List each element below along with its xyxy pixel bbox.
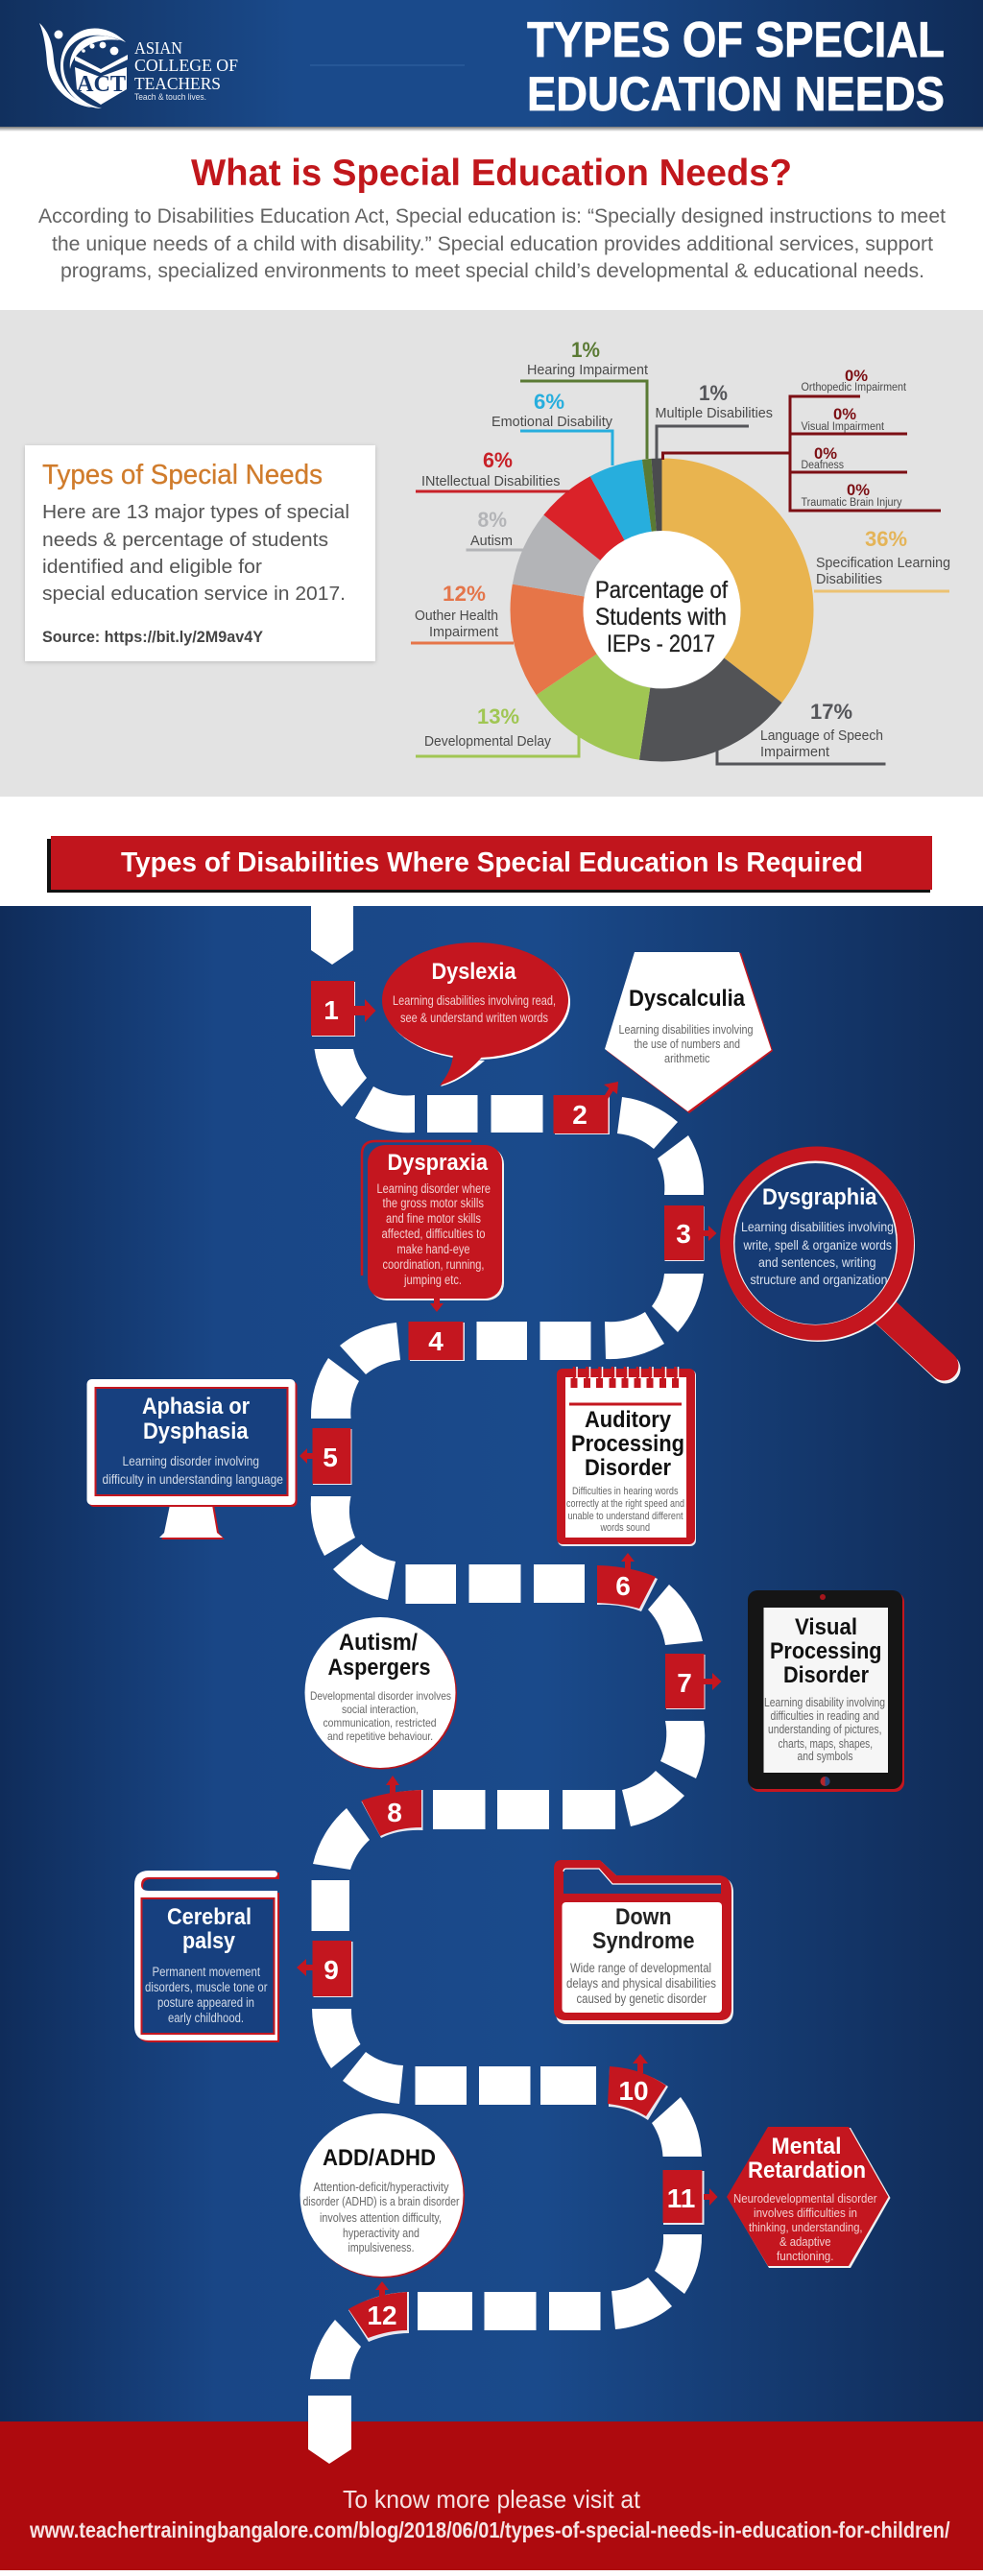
text card: identified and eligible for [42, 557, 262, 578]
card: Cerebral palsy book: palsy [182, 1928, 236, 1954]
label: specific learning disabilities: Specification Learning [816, 556, 950, 571]
logo: Asian College of Teachers: COLLEGE OF [134, 56, 238, 75]
card: Down Syndrome folder: caused by genetic disorder [576, 1992, 707, 2006]
step 1 marker: 1 [324, 995, 339, 1025]
path end arrow [308, 2396, 351, 2464]
card: Dysgraphia magnifying glass [720, 1146, 946, 1369]
step 1 marker [311, 981, 376, 1037]
label: hearing impairment [520, 338, 648, 459]
card: Aphasia or Dysphasia monitor [86, 1379, 298, 1539]
card: Mental Retardation hexagon: Neurodevelopmental disorder [733, 2191, 877, 2206]
text card: Types of Special Needs [42, 460, 323, 490]
label: language of speech impairment: 17% [810, 700, 852, 724]
step 10 marker [608, 2054, 668, 2120]
label: autism: 8% [478, 508, 507, 532]
card: Visual Processing Disorder tablet: Processing [770, 1638, 881, 1664]
step 9 marker: 9 [324, 1955, 339, 1985]
card: Auditory Processing Disorder notepad: Processing [571, 1431, 684, 1457]
logo: Asian College of Teachers [39, 23, 238, 108]
card: Auditory Processing Disorder notepad: unable to understand different [568, 1511, 683, 1522]
label: language of speech impairment: Language of Speech [760, 728, 883, 744]
step 12 marker: 12 [367, 2301, 397, 2330]
intro paragraph: According to Disabilities Education Act, Special education is: “Specially designed instructions to meet [38, 204, 946, 227]
step 4 marker [409, 1322, 465, 1361]
label: specific learning disabilities: Disabilities [816, 572, 882, 587]
card: Dyscalculia pentagon: arithmetic [664, 1051, 710, 1065]
label group: zero percent categories [662, 367, 941, 511]
panel: types of special needs chart section [0, 310, 983, 797]
card: Cerebral palsy book: disorders, muscle tone or [145, 1980, 268, 1994]
card: Auditory Processing Disorder notepad: Auditory [585, 1407, 672, 1433]
label: hearing impairment: 1% [571, 338, 600, 362]
card: ADD/ADHD circle: ADD/ADHD [323, 2145, 436, 2171]
label: language of speech impairment [717, 700, 885, 764]
footer text [29, 2485, 950, 2542]
step 2 marker: 2 [572, 1100, 587, 1130]
header band [0, 0, 983, 131]
card: Aphasia or Dysphasia monitor: Learning disorder involving [123, 1453, 259, 1468]
label: other health impairment [411, 582, 514, 643]
card: Mental Retardation hexagon: involves difficulties in [754, 2206, 857, 2220]
card: Dyspraxia rounded note: jumping etc. [403, 1273, 462, 1287]
card: Cerebral palsy book: Cerebral [167, 1904, 252, 1930]
card: Dysgraphia magnifying glass: write, spell & organize words [743, 1237, 892, 1252]
text card: needs & percentage of students [42, 530, 328, 551]
label: other health impairment: Impairment [429, 625, 498, 640]
card: Dyslexia speech bubble: Dyslexia [432, 959, 516, 985]
card: Visual Processing Disorder tablet: difficulties in reading and [770, 1709, 879, 1723]
card: Autism/Aspergers circle: Autism/ [339, 1630, 418, 1656]
main title [527, 12, 945, 121]
card: Dyslexia speech bubble [382, 942, 570, 1086]
card: Mental Retardation hexagon: Retardation [748, 2158, 866, 2183]
section banner [47, 836, 932, 893]
donut chart [547, 495, 778, 726]
card: Dyscalculia pentagon: Learning disabilities involving [618, 1022, 753, 1037]
intro heading: What is Special Education Needs? [191, 153, 792, 194]
card: Visual Processing Disorder tablet: Visual [795, 1614, 857, 1640]
card: Dysgraphia magnifying glass: structure and organization [751, 1272, 887, 1287]
logo: Asian College of Teachers: ACT [77, 72, 126, 97]
road path segments [310, 906, 705, 2379]
label: autism: Autism [470, 534, 513, 549]
donut centre label: Students with [595, 604, 727, 631]
card: Dyscalculia pentagon: the use of numbers and [634, 1037, 740, 1051]
step 11 marker: 11 [667, 2183, 695, 2213]
step 8 marker: 8 [387, 1798, 402, 1827]
card: Dyscalculia pentagon [605, 952, 773, 1113]
card: Auditory Processing Disorder notepad: correctly at the right speed and [566, 1498, 684, 1510]
text card: special education service in 2017. [42, 584, 346, 605]
card: Aphasia or Dysphasia monitor: Dysphasia [143, 1419, 249, 1444]
step 12 marker [348, 2281, 409, 2342]
label group: zero percent categories: 0% [814, 444, 837, 463]
card: Cerebral palsy book: early childhood. [168, 2011, 244, 2025]
card: Mental Retardation hexagon: Mental [772, 2134, 841, 2159]
logo: Asian College of Teachers: TEACHERS [134, 74, 221, 93]
card: Dyslexia speech bubble: see & understand written words [400, 1010, 548, 1025]
card: Dyspraxia rounded note: Learning disorder where [376, 1181, 491, 1196]
label: emotional disability: Emotional Disability [492, 415, 613, 430]
intro paragraph: programs, specialized environments to meet special child’s developmental & educational needs. [60, 259, 924, 282]
label: intellectual disabilities [416, 448, 569, 491]
card: Dyscalculia pentagon: Dyscalculia [629, 986, 746, 1012]
card: Down Syndrome folder [554, 1860, 733, 2024]
card: Visual Processing Disorder tablet: Disorder [783, 1662, 869, 1688]
card: ADD/ADHD circle: Attention-deficit/hyperactivity [313, 2180, 449, 2194]
label group: zero percent categories: 0% [833, 405, 856, 423]
card: Visual Processing Disorder tablet: and symbols [797, 1750, 852, 1763]
footer text: To know more please visit at [343, 2485, 641, 2514]
intro section [38, 153, 946, 282]
card: Auditory Processing Disorder notepad [557, 1367, 696, 1546]
card: Dyspraxia rounded note: affected, difficulties to [382, 1227, 486, 1241]
card: Auditory Processing Disorder notepad: Disorder [585, 1455, 671, 1481]
label: specific learning disabilities [814, 527, 950, 591]
card: Dysgraphia magnifying glass: Learning disabilities involving [741, 1219, 894, 1234]
card: Cerebral palsy book: posture appeared in [157, 1995, 254, 2010]
step 3 marker [664, 1205, 716, 1261]
card: Down Syndrome folder: delays and physical disabilities [566, 1976, 716, 1991]
card: Dyspraxia rounded note: and fine motor skills [386, 1211, 481, 1226]
step 6 marker: 6 [615, 1571, 631, 1601]
card: Visual Processing Disorder tablet [748, 1590, 904, 1792]
label: other health impairment: Outher Health [415, 608, 498, 624]
label group: zero percent categories: Visual Impairment [801, 421, 885, 433]
label: intellectual disabilities: INtellectual Disabilities [421, 474, 561, 489]
label: multiple disabilities [655, 381, 773, 459]
card: Auditory Processing Disorder notepad: Difficulties in hearing words [572, 1486, 679, 1497]
card: Autism/Aspergers circle: and repetitive behaviour. [327, 1729, 433, 1743]
step 3 marker: 3 [676, 1219, 691, 1249]
card: Cerebral palsy book [134, 1871, 279, 2042]
card: Autism/Aspergers circle [305, 1617, 457, 1770]
label: language of speech impairment: Impairment [760, 745, 829, 760]
step 5 marker [300, 1428, 351, 1485]
step 10 marker: 10 [618, 2076, 649, 2106]
card: ADD/ADHD circle: impulsiveness. [348, 2240, 415, 2254]
main title: EDUCATION NEEDS [527, 67, 945, 121]
card: Dysgraphia magnifying glass: and sentences, writing [758, 1254, 875, 1270]
label group: zero percent categories: 0% [845, 367, 868, 385]
card: Visual Processing Disorder tablet: understanding of pictures, [768, 1723, 881, 1736]
card: Autism/Aspergers circle: social interaction, [342, 1703, 419, 1716]
card: Mental Retardation hexagon [727, 2127, 891, 2268]
label: autism [467, 508, 531, 550]
intro paragraph [38, 204, 946, 282]
card: ADD/ADHD circle: disorder (ADHD) is a brain disorder [303, 2194, 460, 2208]
step 11 marker [662, 2170, 718, 2225]
donut centre label: IEPs - 2017 [607, 631, 715, 657]
label: developmental delay: Developmental Delay [424, 734, 552, 750]
label: developmental delay: 13% [477, 704, 519, 728]
text card: Source: https://bit.ly/2M9av4Y [42, 628, 264, 646]
step 7 marker [665, 1654, 722, 1709]
logo: Asian College of Teachers: Teach & touch lives. [134, 92, 206, 103]
card: Visual Processing Disorder tablet: charts, maps, shapes, [778, 1737, 873, 1751]
card: Autism/Aspergers circle: Developmental disorder involves [310, 1689, 451, 1703]
card: Visual Processing Disorder tablet: Learning disability involving [764, 1696, 885, 1709]
card: Mental Retardation hexagon: & adaptive [779, 2234, 831, 2249]
card: Down Syndrome folder: Down [615, 1904, 672, 1930]
card: Down Syndrome folder: Syndrome [592, 1928, 695, 1954]
card: Mental Retardation hexagon: thinking, understanding, [749, 2220, 862, 2234]
label: multiple disabilities: Multiple Disabilities [655, 406, 773, 421]
step 6 marker [597, 1553, 658, 1611]
card: ADD/ADHD circle: hyperactivity and [343, 2226, 420, 2240]
label: developmental delay [416, 704, 579, 756]
card: Aphasia or Dysphasia monitor: Aphasia or [142, 1394, 250, 1419]
card: Dyspraxia rounded note: Dyspraxia [388, 1150, 489, 1176]
card: Autism/Aspergers circle: Aspergers [328, 1655, 430, 1681]
card: Dyspraxia rounded note: make hand-eye [397, 1242, 470, 1256]
card: Dyspraxia rounded note [362, 1141, 504, 1312]
card: Dyspraxia rounded note: coordination, running, [382, 1257, 484, 1272]
label group: zero percent categories: Orthopedic Impairment [801, 382, 907, 394]
step 9 marker [297, 1941, 353, 1997]
step 2 marker [553, 1082, 618, 1134]
step 8 marker [361, 1776, 422, 1838]
label: specific learning disabilities: 36% [865, 527, 907, 551]
card: Dyspraxia rounded note: the gross motor skills [382, 1196, 484, 1210]
card: Autism/Aspergers circle: communication, restricted [323, 1716, 436, 1729]
step 5 marker: 5 [323, 1443, 338, 1472]
panel: disabilities path section background [0, 906, 983, 2421]
label group: zero percent categories: 0% [847, 481, 870, 499]
card: Mental Retardation hexagon: functioning. [777, 2249, 833, 2263]
text card: Here are 13 major types of special [42, 502, 349, 523]
label group: zero percent categories: Traumatic Brain Injury [801, 497, 902, 509]
footer band [0, 2396, 983, 2570]
card: Down Syndrome folder: Wide range of developmental [570, 1961, 711, 1975]
label: hearing impairment: Hearing Impairment [527, 363, 648, 378]
card: Cerebral palsy book: Permanent movement [152, 1965, 260, 1979]
donut centre label: Parcentage of [595, 577, 728, 604]
intro paragraph: the unique needs of a child with disability.” Special education provides additional services, support [52, 232, 933, 255]
logo: Asian College of Teachers: ASIAN [134, 38, 182, 58]
label: intellectual disabilities: 6% [483, 448, 513, 472]
card: Auditory Processing Disorder notepad: words sound [600, 1522, 650, 1534]
section banner: Types of Disabilities Where Special Education Is Required [121, 847, 863, 878]
label: emotional disability [492, 390, 613, 465]
card: Aphasia or Dysphasia monitor: difficulty in understanding language [102, 1471, 283, 1487]
card: ADD/ADHD circle: involves attention difficulty, [320, 2210, 442, 2225]
card: Dysgraphia magnifying glass: Dysgraphia [762, 1184, 877, 1210]
text card [25, 445, 375, 661]
label: emotional disability: 6% [534, 390, 564, 414]
label group: zero percent categories: Deafness [801, 460, 844, 471]
step 4 marker: 4 [428, 1326, 444, 1356]
card: Dyslexia speech bubble: Learning disabilities involving read, [393, 992, 556, 1008]
card: ADD/ADHD circle [300, 2113, 465, 2278]
label: other health impairment: 12% [443, 582, 486, 606]
step 7 marker: 7 [677, 1668, 692, 1698]
label: multiple disabilities: 1% [699, 381, 728, 405]
donut centre label [584, 531, 741, 688]
